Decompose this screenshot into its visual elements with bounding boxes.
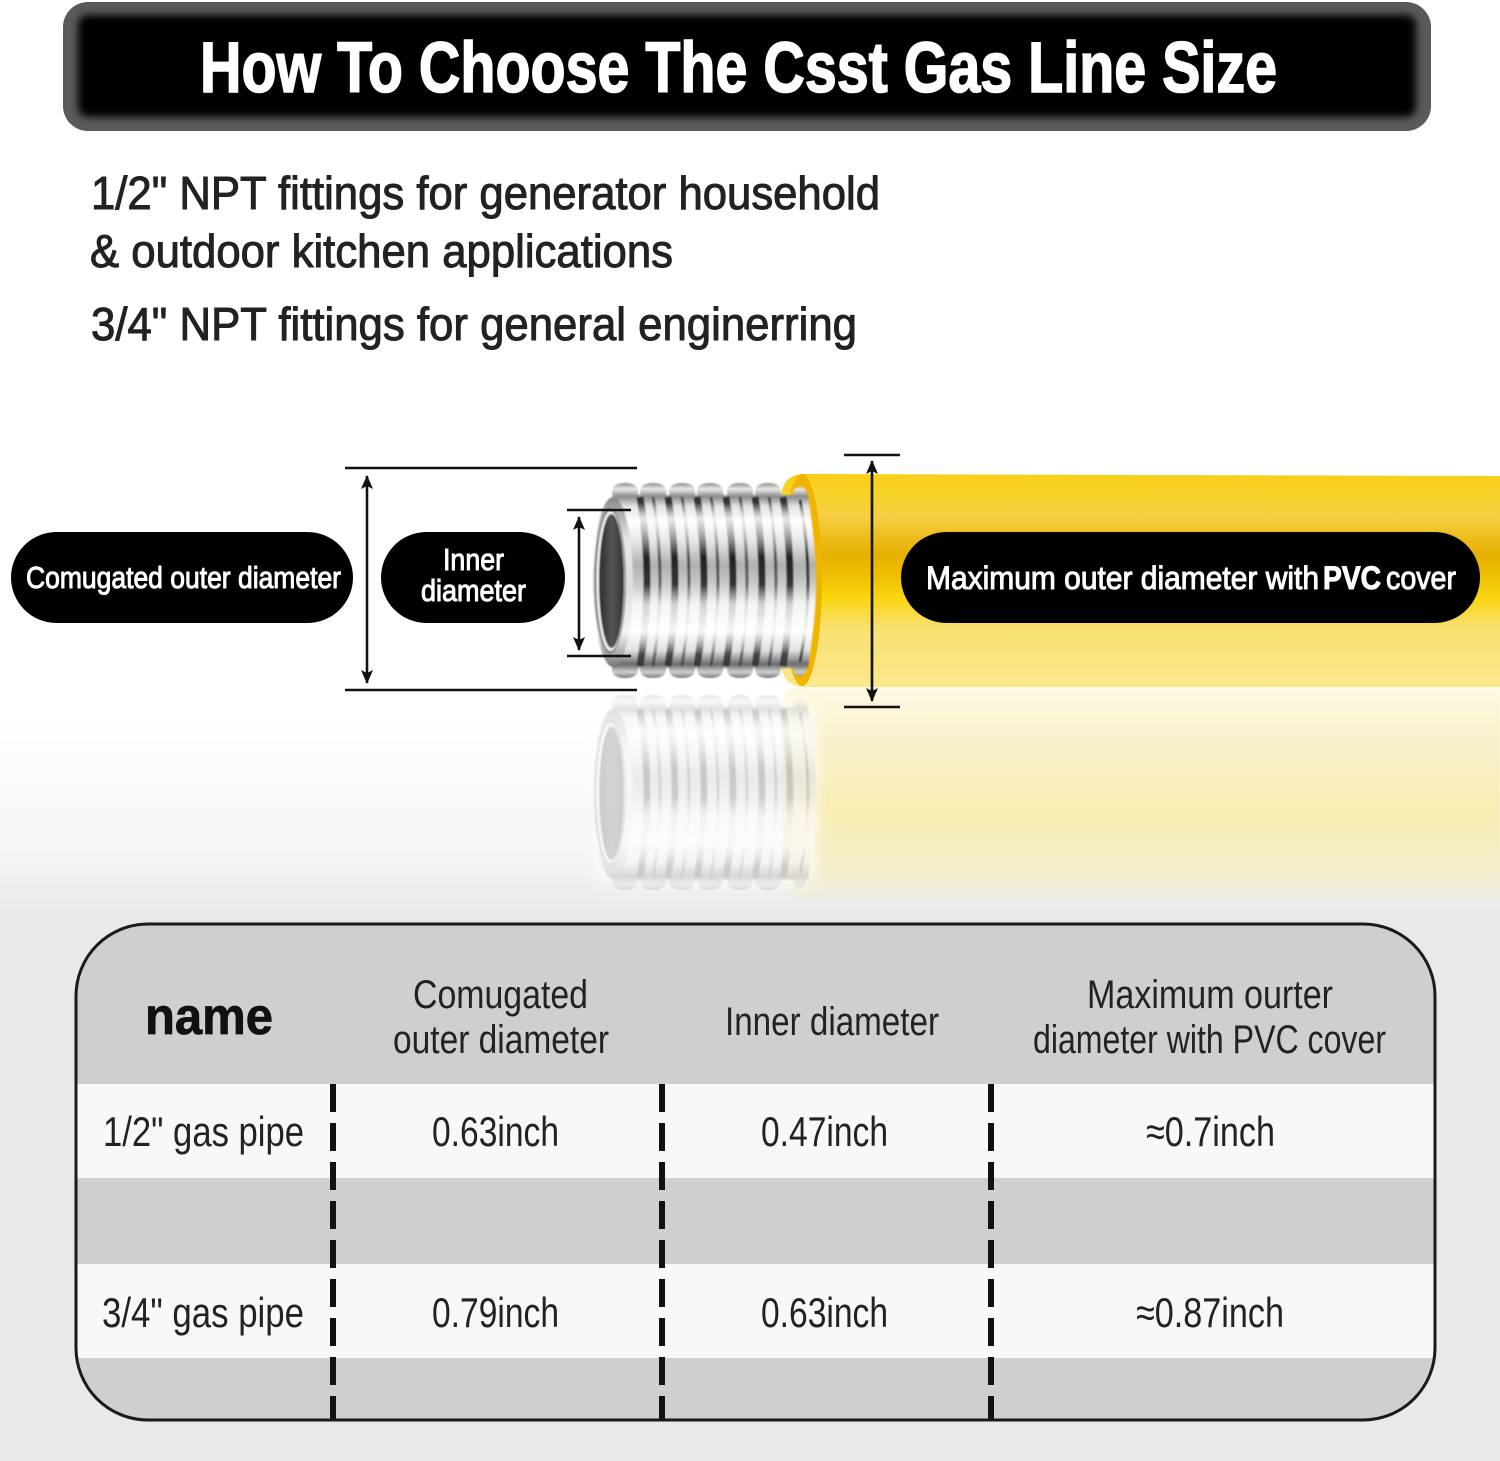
table header	[145, 973, 1386, 1062]
dimension: maximum outer diameter	[844, 455, 900, 707]
intro text: & outdoor kitchen applications	[90, 225, 673, 277]
table header: name	[145, 988, 273, 1046]
pill: inner diameter: diameter	[421, 573, 526, 608]
pill: maximum outer diameter with PVC cover: Maximum outer diameter with	[926, 560, 1319, 596]
row: 3/4 inch gas pipe: ≈0.87inch	[1136, 1289, 1284, 1336]
pill: maximum outer diameter with PVC cover: cover	[1386, 560, 1456, 596]
row: 3/4 inch gas pipe: 0.63inch	[761, 1289, 888, 1336]
dimension: corrugated outer diameter	[345, 468, 637, 690]
row: 3/4 inch gas pipe: 0.79inch	[432, 1289, 559, 1336]
pipe reflection	[593, 687, 1500, 898]
title banner	[63, 2, 1431, 131]
row: 1/2 inch gas pipe: 1/2" gas pipe	[103, 1108, 304, 1155]
row: 1/2 inch gas pipe: ≈0.7inch	[1146, 1108, 1275, 1155]
row: 1/2 inch gas pipe	[103, 1108, 1275, 1155]
intro text: 3/4" NPT fittings for general enginerring	[91, 298, 857, 350]
row: 3/4 inch gas pipe: 3/4" gas pipe	[102, 1289, 304, 1336]
yellow gas pipe with fitting	[593, 474, 1500, 687]
table header: Maximum ourter	[1087, 973, 1333, 1017]
table header: diameter with PVC cover	[1033, 1018, 1386, 1062]
table header: outer diameter	[393, 1018, 609, 1062]
row: 1/2 inch gas pipe: 0.63inch	[432, 1108, 559, 1155]
row: 3/4 inch gas pipe	[102, 1289, 1284, 1336]
pill: maximum outer diameter with PVC cover: PVC	[1323, 560, 1381, 596]
dimension: inner diameter	[567, 510, 631, 656]
pill: corrugated outer diameter	[11, 532, 353, 623]
table header: Inner diameter	[725, 1000, 939, 1044]
intro text	[90, 167, 880, 350]
table row backgrounds	[77, 1084, 1435, 1358]
row: 1/2 inch gas pipe: 0.47inch	[761, 1108, 888, 1155]
intro text: 1/2" NPT fittings for generator household	[91, 167, 880, 219]
pill: corrugated outer diameter: Comugated outer diameter	[26, 560, 341, 595]
pill: inner diameter: Inner	[443, 542, 504, 577]
pill: maximum outer diameter with PVC cover	[901, 532, 1480, 623]
table header: Comugated	[413, 973, 588, 1017]
pill: inner diameter	[381, 532, 565, 623]
size comparison table	[76, 924, 1435, 1420]
title text: How To Choose The Csst Gas Line Size	[200, 29, 1277, 108]
